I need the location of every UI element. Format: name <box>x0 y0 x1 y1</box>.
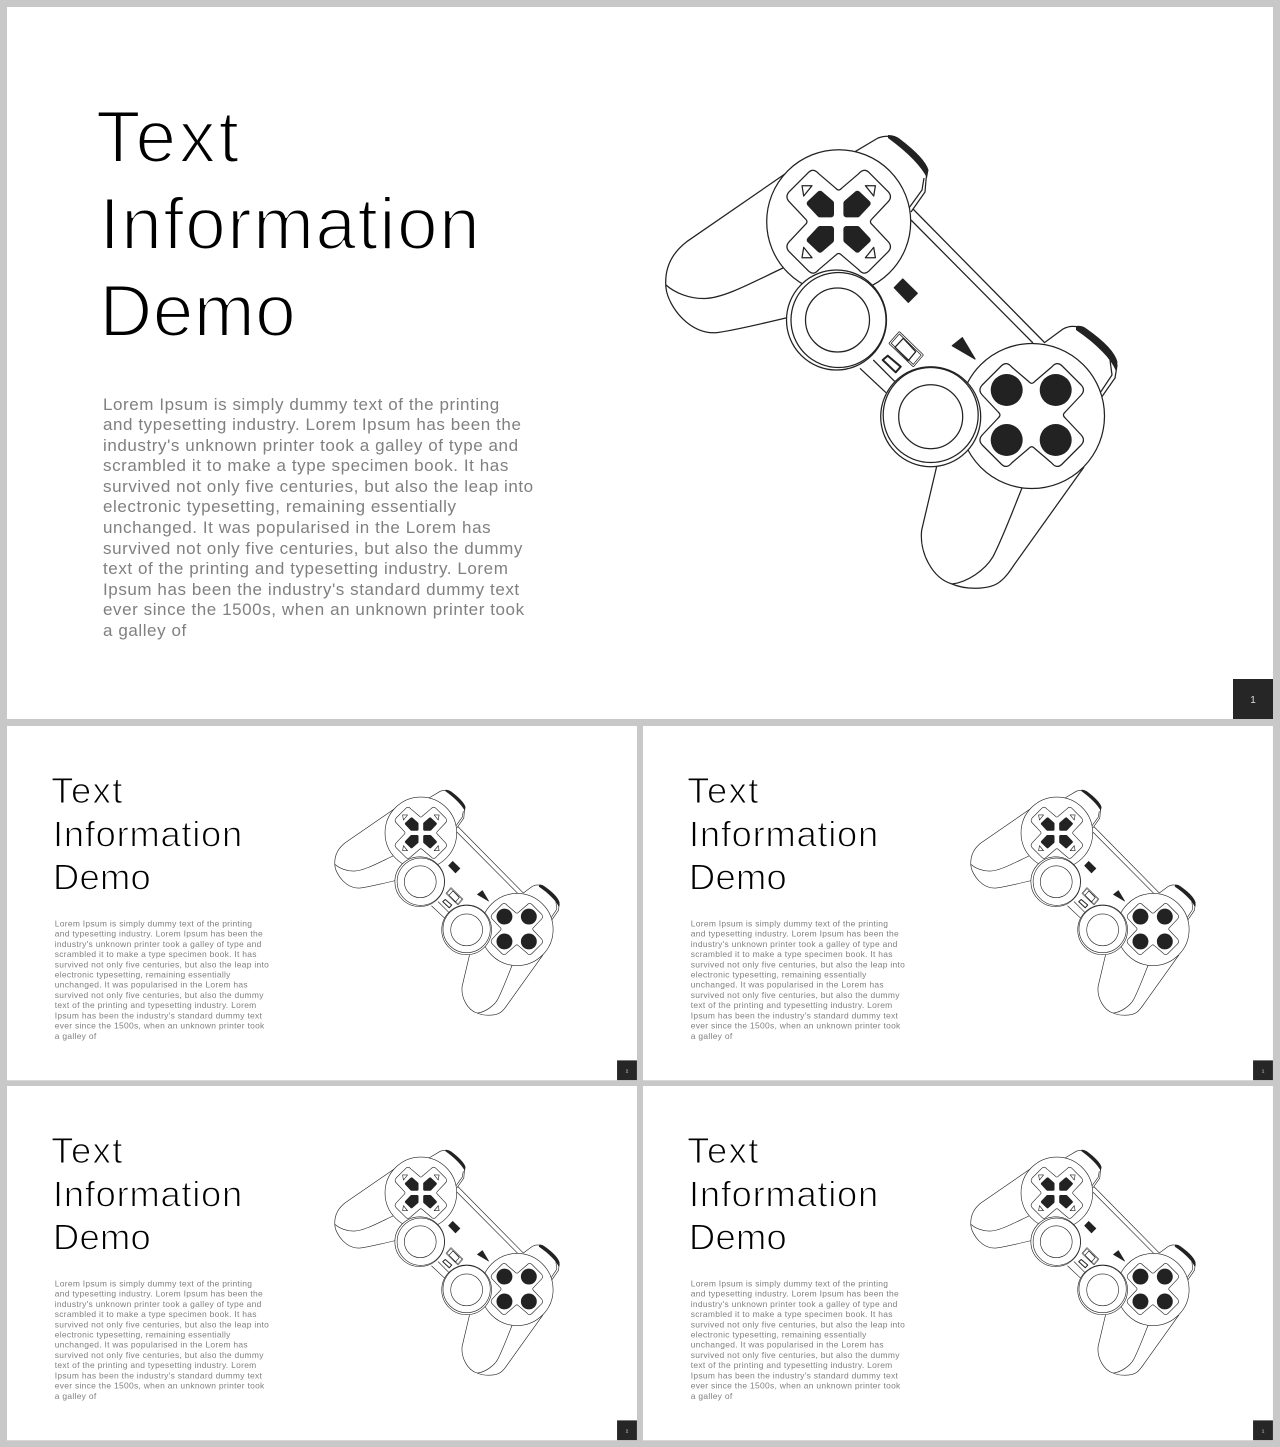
body text: unchanged. It was popularised in the Lorem has <box>55 1340 248 1350</box>
body text: a galley of <box>103 621 187 640</box>
icon: game controller <box>665 135 1118 589</box>
body text: Lorem Ipsum is simply dummy text of the printing <box>55 919 252 928</box>
panel: slide 4 <box>7 1086 637 1440</box>
body text: Ipsum has been the industry's standard dummy text <box>691 1371 898 1381</box>
body text: industry's unknown printer took a galley of type and <box>103 436 519 455</box>
page number <box>617 1060 637 1080</box>
page number: 1 <box>1250 695 1256 706</box>
title: Demo <box>689 1217 787 1258</box>
body text: industry's unknown printer took a galley of type and <box>691 939 898 949</box>
title: Information <box>689 1174 879 1214</box>
title <box>96 97 481 352</box>
body text <box>690 919 905 1041</box>
title: Information <box>100 184 481 265</box>
body text: and typesetting industry. Lorem Ipsum has been the <box>55 1289 263 1299</box>
title <box>51 1131 243 1258</box>
body text: survived not only five centuries, but also the dummy <box>55 1351 264 1360</box>
title <box>687 1131 879 1258</box>
page number: 1 <box>1262 1428 1264 1434</box>
panel: slide 5 <box>643 1086 1273 1440</box>
body text: text of the printing and typesetting industry. Lorem <box>103 559 508 578</box>
body text: a galley of <box>55 1032 96 1041</box>
icon: game controller <box>334 790 560 1016</box>
body text: unchanged. It was popularised in the Lorem has <box>55 980 248 990</box>
body text: Lorem Ipsum is simply dummy text of the printing <box>55 1279 252 1288</box>
body text: electronic typesetting, remaining essentially <box>103 497 457 516</box>
body text <box>54 1279 269 1401</box>
icon: game controller <box>970 790 1196 1016</box>
title: Text <box>51 1131 124 1171</box>
page number: 2 <box>626 1068 628 1074</box>
body text: and typesetting industry. Lorem Ipsum has been the <box>691 929 899 939</box>
page number <box>1233 679 1273 719</box>
body text: scrambled it to make a type specimen book. It has <box>55 950 257 959</box>
body text: electronic typesetting, remaining essentially <box>55 1330 231 1340</box>
body text: Lorem Ipsum is simply dummy text of the printing <box>691 1279 888 1288</box>
body text: electronic typesetting, remaining essentially <box>691 1330 867 1340</box>
body text: text of the printing and typesetting industry. Lorem <box>55 1001 257 1010</box>
body text: survived not only five centuries, but also the dummy <box>691 1351 900 1360</box>
body text: survived not only five centuries, but also the leap into <box>55 1320 269 1329</box>
panel: slide 3 <box>643 726 1273 1080</box>
title: Text <box>687 771 760 811</box>
body text: scrambled it to make a type specimen book. It has <box>691 1310 893 1319</box>
panel: slide 2 <box>7 726 637 1080</box>
body text: a galley of <box>691 1392 732 1401</box>
panel: main slide <box>7 7 1273 719</box>
body text: and typesetting industry. Lorem Ipsum has been the <box>55 929 263 939</box>
body text: Ipsum has been the industry's standard dummy text <box>55 1371 262 1381</box>
body text: Lorem Ipsum is simply dummy text of the printing <box>103 394 500 414</box>
body text: ever since the 1500s, when an unknown printer took <box>103 600 525 619</box>
body text: text of the printing and typesetting industry. Lorem <box>691 1361 893 1370</box>
body text: survived not only five centuries, but also the leap into <box>103 477 534 496</box>
title: Demo <box>689 857 787 898</box>
body text: unchanged. It was popularised in the Lorem has <box>103 518 491 537</box>
title: Information <box>53 814 243 854</box>
page number <box>1253 1060 1273 1080</box>
body text: and typesetting industry. Lorem Ipsum has been the <box>691 1289 899 1299</box>
body text: industry's unknown printer took a galley of type and <box>55 939 262 949</box>
body text: survived not only five centuries, but also the dummy <box>55 991 264 1000</box>
body text: text of the printing and typesetting industry. Lorem <box>55 1361 257 1370</box>
icon: game controller <box>334 1150 560 1376</box>
body text: ever since the 1500s, when an unknown printer took <box>55 1021 265 1031</box>
body text: industry's unknown printer took a galley of type and <box>55 1299 262 1309</box>
body text: survived not only five centuries, but also the dummy <box>103 539 523 558</box>
body text: ever since the 1500s, when an unknown printer took <box>691 1021 901 1031</box>
body text: survived not only five centuries, but also the dummy <box>691 991 900 1000</box>
body text: text of the printing and typesetting industry. Lorem <box>691 1001 893 1010</box>
page number: 2 <box>626 1428 628 1434</box>
body text: scrambled it to make a type specimen book. It has <box>691 950 893 959</box>
body text: and typesetting industry. Lorem Ipsum has been the <box>103 415 521 434</box>
body text: ever since the 1500s, when an unknown printer took <box>55 1381 265 1391</box>
title: Demo <box>53 857 151 898</box>
page number: 1 <box>1262 1068 1264 1074</box>
title: Demo <box>100 271 296 352</box>
body text: electronic typesetting, remaining essentially <box>55 970 231 980</box>
body text: Ipsum has been the industry's standard dummy text <box>691 1011 898 1021</box>
body text: Ipsum has been the industry's standard dummy text <box>103 580 520 599</box>
body text: unchanged. It was popularised in the Lorem has <box>691 1340 884 1350</box>
title: Demo <box>53 1217 151 1258</box>
page number <box>617 1420 637 1440</box>
page number <box>1253 1420 1273 1440</box>
title: Text <box>687 1131 760 1171</box>
body text: electronic typesetting, remaining essentially <box>691 970 867 980</box>
title <box>687 771 879 898</box>
title: Information <box>53 1174 243 1214</box>
title: Information <box>689 814 879 854</box>
body text <box>103 394 534 640</box>
title <box>51 771 243 898</box>
body text <box>54 919 269 1041</box>
body text: Ipsum has been the industry's standard dummy text <box>55 1011 262 1021</box>
body text: survived not only five centuries, but also the leap into <box>691 1320 905 1329</box>
body text: survived not only five centuries, but also the leap into <box>55 960 269 969</box>
title: Text <box>51 771 124 811</box>
body text: industry's unknown printer took a galley of type and <box>691 1299 898 1309</box>
body text: Lorem Ipsum is simply dummy text of the printing <box>691 919 888 928</box>
body text: a galley of <box>55 1392 96 1401</box>
body text: survived not only five centuries, but also the leap into <box>691 960 905 969</box>
body text: a galley of <box>691 1032 732 1041</box>
body text: unchanged. It was popularised in the Lorem has <box>691 980 884 990</box>
body text: scrambled it to make a type specimen book. It has <box>103 456 509 475</box>
body text <box>690 1279 905 1401</box>
icon: game controller <box>970 1150 1196 1376</box>
body text: ever since the 1500s, when an unknown printer took <box>691 1381 901 1391</box>
body text: scrambled it to make a type specimen book. It has <box>55 1310 257 1319</box>
title: Text <box>96 97 242 178</box>
